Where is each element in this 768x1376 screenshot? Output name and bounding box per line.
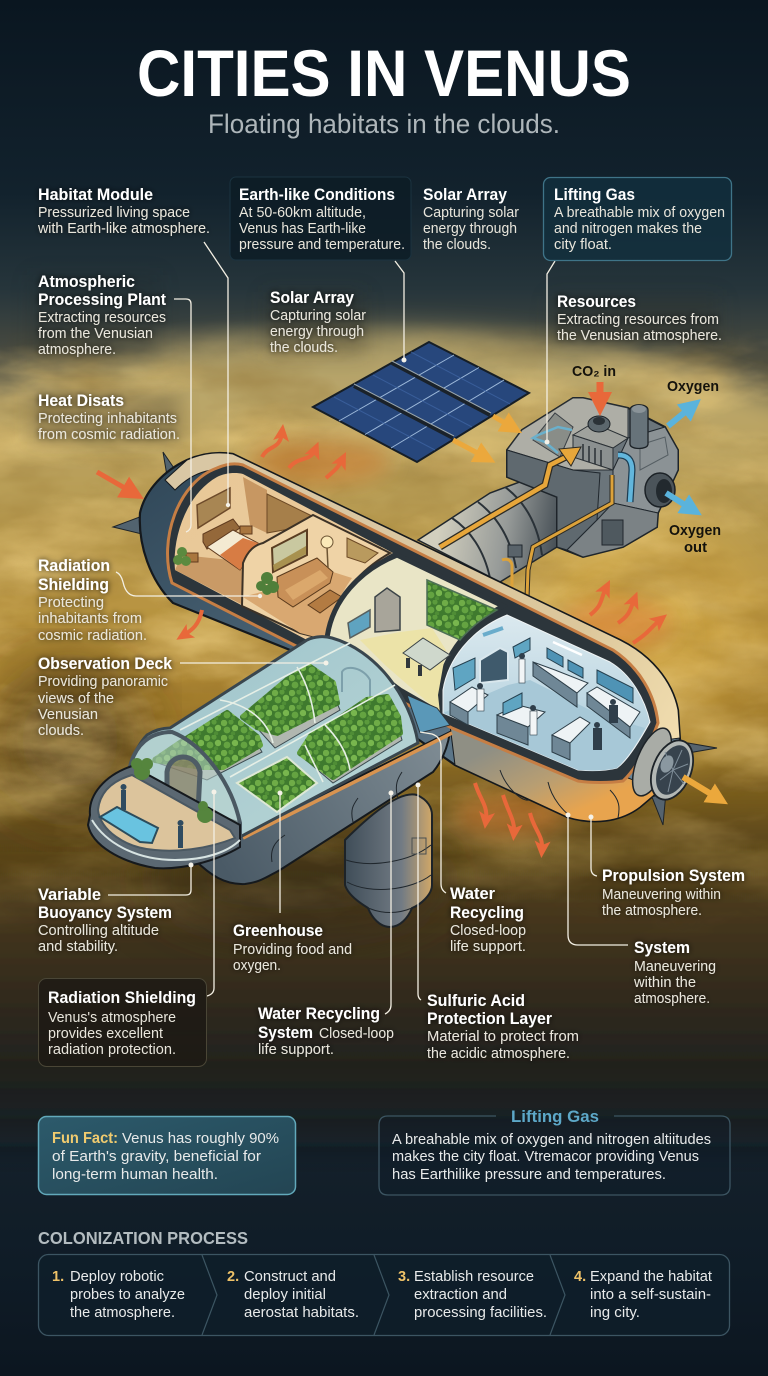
label: solar array middle: Capturing solar bbox=[270, 308, 366, 324]
callout: fun fact: Fun Fact: bbox=[52, 1130, 118, 1147]
panel: lifting gas top bbox=[544, 178, 732, 260]
lower pod bbox=[345, 794, 432, 927]
panel: lifting gas bottom: has Earthilike pressure and temperatures. bbox=[392, 1167, 666, 1183]
label: habitat module: Habitat Module bbox=[38, 186, 153, 204]
panel: radiation shielding: Radiation Shielding bbox=[48, 989, 196, 1007]
label: heat disats: from cosmic radiation. bbox=[38, 427, 180, 443]
panel: lifting gas top: city float. bbox=[554, 237, 612, 253]
atmospheric processing plant illustration bbox=[418, 398, 678, 598]
arch doorway bbox=[167, 757, 200, 812]
label: resources: Extracting resources from bbox=[557, 312, 719, 328]
label: observation deck: views of the bbox=[38, 691, 114, 707]
door bbox=[375, 588, 400, 632]
leader lines bbox=[108, 242, 628, 1014]
label: system: atmosphere. bbox=[634, 991, 710, 1007]
right underside bbox=[450, 725, 660, 821]
staff bbox=[477, 653, 618, 750]
desks sides bbox=[450, 662, 630, 760]
label: water recycling right bbox=[450, 885, 526, 955]
label: atmospheric processing plant bbox=[38, 273, 166, 358]
plant silhouette bbox=[507, 398, 678, 557]
label: observation deck bbox=[38, 655, 173, 739]
label: system: Maneuvering bbox=[634, 959, 716, 975]
panel: radiation shielding bbox=[38, 978, 206, 1066]
arrows: heat rising right bbox=[590, 588, 660, 643]
bed bbox=[203, 519, 240, 549]
label: radiation shielding left: Radiation bbox=[38, 557, 110, 575]
pool bbox=[100, 807, 158, 843]
label: atmospheric processing plant: Extracting resources bbox=[38, 310, 166, 326]
panel: radiation shielding: provides excellent bbox=[48, 1026, 163, 1042]
step 3: 3. bbox=[398, 1269, 410, 1285]
label: propulsion system: the atmosphere. bbox=[602, 903, 702, 919]
arrow: oxygen out bbox=[666, 493, 690, 508]
step 1: probes to analyze bbox=[70, 1287, 185, 1303]
heading: colonization process: COLONIZATION PROCESS bbox=[38, 1228, 248, 1248]
panel: lifting gas bottom bbox=[379, 1108, 730, 1195]
label: water recycling right: Recycling bbox=[450, 904, 524, 922]
label: sulfuric acid protection layer bbox=[427, 992, 579, 1062]
floor bbox=[443, 680, 645, 771]
label: atmospheric processing plant: Processing Plant bbox=[38, 291, 166, 309]
label: system: System bbox=[634, 939, 690, 957]
arrow: oxygen bbox=[668, 408, 690, 426]
panel: earth-like conditions: At 50-60km altitude, bbox=[239, 205, 366, 221]
glass dome bbox=[130, 637, 418, 837]
engine: propulsion nozzle bbox=[625, 723, 717, 825]
label: radiation shielding left: Shielding bbox=[38, 576, 109, 594]
step 4 bbox=[574, 1269, 712, 1321]
label: sulfuric acid protection layer: the acidic atmosphere. bbox=[427, 1046, 570, 1062]
outlet port bbox=[645, 473, 675, 507]
arrow: left inflow bbox=[97, 472, 130, 491]
subtitle: Floating habitats in the clouds. bbox=[208, 109, 560, 139]
desk tops bbox=[450, 662, 640, 743]
step 1 bbox=[52, 1269, 185, 1321]
plants back middle bbox=[243, 667, 337, 733]
monitor bbox=[348, 610, 370, 638]
title: CITIES IN VENUS bbox=[137, 36, 631, 110]
sofa bbox=[277, 558, 333, 607]
label: oxygen out bbox=[669, 522, 721, 556]
arrow: propulsion exhaust bbox=[683, 777, 716, 797]
hull bbox=[195, 732, 450, 884]
wall screens bbox=[453, 658, 475, 690]
label: radiation shielding left: cosmic radiation. bbox=[38, 628, 147, 644]
label: sulfuric acid protection layer: Material to protect from bbox=[427, 1029, 579, 1045]
bedroom and lounge cutaway bbox=[173, 473, 393, 640]
label: solar array top: the clouds. bbox=[423, 237, 491, 253]
panel: colonization process steps bbox=[38, 1254, 730, 1336]
panel: radiation shielding: radiation protection. bbox=[48, 1042, 176, 1058]
upper cream band bbox=[165, 453, 680, 742]
label: CO2 in: CO₂ in bbox=[572, 363, 616, 380]
label: water recycling system: Closed-loop bbox=[319, 1026, 394, 1042]
step 2: Construct and bbox=[244, 1269, 336, 1285]
label: solar array top bbox=[423, 186, 519, 253]
label: water recycling system: Water Recycling bbox=[258, 1005, 380, 1023]
label: solar array top: energy through bbox=[423, 221, 517, 237]
frame bbox=[168, 464, 658, 782]
arrow: heat down left bbox=[184, 610, 202, 635]
step 4: ing city. bbox=[590, 1305, 640, 1321]
label: resources: Resources bbox=[557, 293, 636, 311]
label: oxygen out: out bbox=[684, 539, 707, 556]
spike: top bbox=[163, 452, 178, 482]
label: greenhouse: oxygen. bbox=[233, 958, 281, 974]
label: radiation shielding left bbox=[38, 557, 147, 644]
panel: earth-like conditions: Venus has Earth-like bbox=[239, 221, 366, 237]
panel: lifting gas bottom: Lifting Gas bbox=[511, 1108, 599, 1126]
label: solar array top: Capturing solar bbox=[423, 205, 519, 221]
door bbox=[480, 648, 508, 683]
label: heat disats: Protecting inhabitants bbox=[38, 411, 177, 427]
label: oxygen: Oxygen bbox=[667, 378, 719, 395]
painting bbox=[197, 488, 230, 528]
label: water recycling system: life support. bbox=[258, 1042, 334, 1058]
step 3 bbox=[398, 1269, 547, 1321]
main habitat tube hull bbox=[113, 452, 680, 821]
label: water recycling system bbox=[258, 1005, 394, 1058]
panel: lifting gas bottom: makes the city float. Vtremacor providing Venus bbox=[392, 1149, 699, 1165]
label: water recycling right: Closed-loop bbox=[450, 923, 526, 939]
label: radiation shielding left: inhabitants from bbox=[38, 611, 142, 627]
railing bbox=[92, 820, 240, 860]
far door bbox=[342, 668, 370, 708]
callout: fun fact: Venus has roughly 90% bbox=[122, 1131, 279, 1147]
step 3: processing facilities. bbox=[414, 1305, 547, 1321]
painting bbox=[272, 530, 307, 572]
label: variable buoyancy system bbox=[38, 886, 172, 955]
label: heat disats: Heat Disats bbox=[38, 392, 124, 410]
inlet valve bbox=[588, 416, 610, 432]
window bbox=[267, 494, 312, 533]
label: propulsion system bbox=[602, 867, 745, 919]
step 2: deploy initial bbox=[244, 1287, 326, 1303]
front cap bbox=[130, 732, 240, 835]
gold conduits bbox=[440, 457, 566, 547]
label: observation deck: clouds. bbox=[38, 723, 84, 739]
step 4: Expand the habitat bbox=[590, 1269, 712, 1285]
curtain bbox=[243, 477, 267, 533]
label: variable buoyancy system: and stability. bbox=[38, 939, 118, 955]
panel: lifting gas top: Lifting Gas bbox=[554, 186, 635, 204]
callout: fun fact: of Earth's gravity, beneficial for bbox=[52, 1149, 261, 1165]
blue pipes bbox=[618, 455, 632, 502]
label: water recycling right: Water bbox=[450, 885, 496, 903]
label: variable buoyancy system: Controlling altitude bbox=[38, 923, 159, 939]
label: variable buoyancy system: Variable bbox=[38, 886, 101, 904]
plants back left bbox=[155, 713, 260, 767]
bed: front dense bbox=[237, 757, 317, 812]
arrows: heat rising left bbox=[262, 433, 342, 478]
chimney bbox=[630, 405, 648, 448]
label: atmospheric processing plant: Atmospheric bbox=[38, 273, 135, 291]
label: heat disats bbox=[38, 392, 180, 443]
figures bbox=[120, 784, 184, 848]
label: habitat module bbox=[37, 186, 210, 237]
plants front right bbox=[300, 697, 400, 777]
bedroom floor bbox=[175, 555, 245, 605]
label: solar array middle: the clouds. bbox=[270, 340, 338, 356]
label: radiation shielding left: Protecting bbox=[38, 595, 104, 611]
operations room cutaway bbox=[327, 555, 503, 713]
observation deck bbox=[88, 758, 240, 868]
callout: fun fact: long-term human health. bbox=[52, 1167, 218, 1183]
label: observation deck: Venusian bbox=[38, 707, 98, 723]
connector tube bbox=[418, 477, 557, 582]
spike: left bbox=[113, 515, 146, 535]
step 2: aerostat habitats. bbox=[244, 1305, 359, 1321]
step 4: into a self-sustain- bbox=[590, 1287, 711, 1303]
plant left bbox=[173, 547, 191, 566]
panel: earth-like conditions: Earth-like Conditions bbox=[239, 186, 395, 204]
planters bbox=[131, 758, 213, 823]
step 2: 2. bbox=[227, 1269, 239, 1285]
blue channel bbox=[407, 695, 450, 733]
label: propulsion system: Maneuvering within bbox=[602, 887, 721, 903]
greenhouse module bbox=[130, 637, 452, 884]
lounge wall bbox=[242, 515, 390, 640]
panel: earth-like conditions: pressure and temperature. bbox=[239, 237, 405, 253]
label: observation deck: Observation Deck bbox=[38, 655, 173, 673]
label: sulfuric acid protection layer: Sulfuric Acid bbox=[427, 992, 525, 1010]
label: atmospheric processing plant: from the Venusian bbox=[38, 326, 153, 342]
floor bbox=[360, 628, 446, 713]
label: greenhouse: Greenhouse bbox=[233, 922, 323, 940]
label: observation deck: Providing panoramic bbox=[38, 674, 168, 690]
arrows: solar power feed bbox=[453, 416, 510, 456]
label: greenhouse bbox=[233, 922, 352, 974]
green wall bbox=[427, 580, 497, 640]
lamp bbox=[327, 547, 328, 568]
laboratory cutaway bbox=[443, 615, 650, 771]
step 2 bbox=[227, 1269, 359, 1321]
label: atmospheric processing plant: atmosphere. bbox=[38, 342, 116, 358]
step 1: Deploy robotic bbox=[70, 1269, 164, 1285]
step 3: Establish resource bbox=[414, 1269, 534, 1285]
solar array illustration bbox=[313, 342, 529, 462]
panel: lifting gas bottom: A breahable mix of oxygen and nitrogen altiitudes bbox=[392, 1132, 711, 1148]
table bbox=[403, 638, 450, 670]
label: water recycling system: System bbox=[258, 1024, 313, 1042]
label: solar array top: Solar Array bbox=[423, 186, 508, 204]
panel: lifting gas top: A breathable mix of oxygen bbox=[554, 205, 725, 221]
label: greenhouse: Providing food and bbox=[233, 942, 352, 958]
label: solar array middle: energy through bbox=[270, 324, 364, 340]
label: resources bbox=[557, 293, 722, 344]
label: habitat module: Pressurized living space bbox=[38, 205, 190, 221]
lounge floor bbox=[243, 572, 352, 640]
step 3: extraction and bbox=[414, 1287, 507, 1303]
step 1: the atmosphere. bbox=[70, 1305, 175, 1321]
label: propulsion system: Propulsion System bbox=[602, 867, 745, 885]
label: variable buoyancy system: Buoyancy System bbox=[38, 904, 172, 922]
arrows: heat sinking bbox=[475, 783, 542, 849]
planting beds: trays bbox=[155, 703, 402, 783]
panel: radiation shielding: Venus's atmosphere bbox=[48, 1010, 176, 1026]
glass ribs bbox=[180, 643, 395, 782]
label: solar array middle bbox=[270, 289, 366, 356]
arrow: CO2 in bbox=[596, 382, 604, 400]
window right bbox=[347, 538, 378, 563]
coffee table bbox=[308, 590, 342, 613]
label: water recycling right: life support. bbox=[450, 939, 526, 955]
step 4: 4. bbox=[574, 1269, 586, 1285]
label: habitat module: with Earth-like atmosphere. bbox=[37, 221, 210, 237]
callout: fun fact bbox=[38, 1116, 296, 1194]
panel: earth-like conditions bbox=[230, 177, 411, 260]
label: sulfuric acid protection layer: Protection Layer bbox=[427, 1010, 553, 1028]
background: Venus sky and cloud layer bbox=[0, 135, 768, 1192]
label: system bbox=[633, 939, 716, 1007]
panel: lifting gas top: and nitrogen makes the bbox=[554, 221, 702, 237]
label: resources: the Venusian atmosphere. bbox=[557, 328, 722, 344]
plant bbox=[256, 572, 279, 595]
label: system: within the bbox=[633, 975, 696, 991]
label: solar array middle: Solar Array bbox=[270, 289, 355, 307]
step 1: 1. bbox=[52, 1269, 64, 1285]
label: oxygen out: Oxygen bbox=[669, 522, 721, 539]
